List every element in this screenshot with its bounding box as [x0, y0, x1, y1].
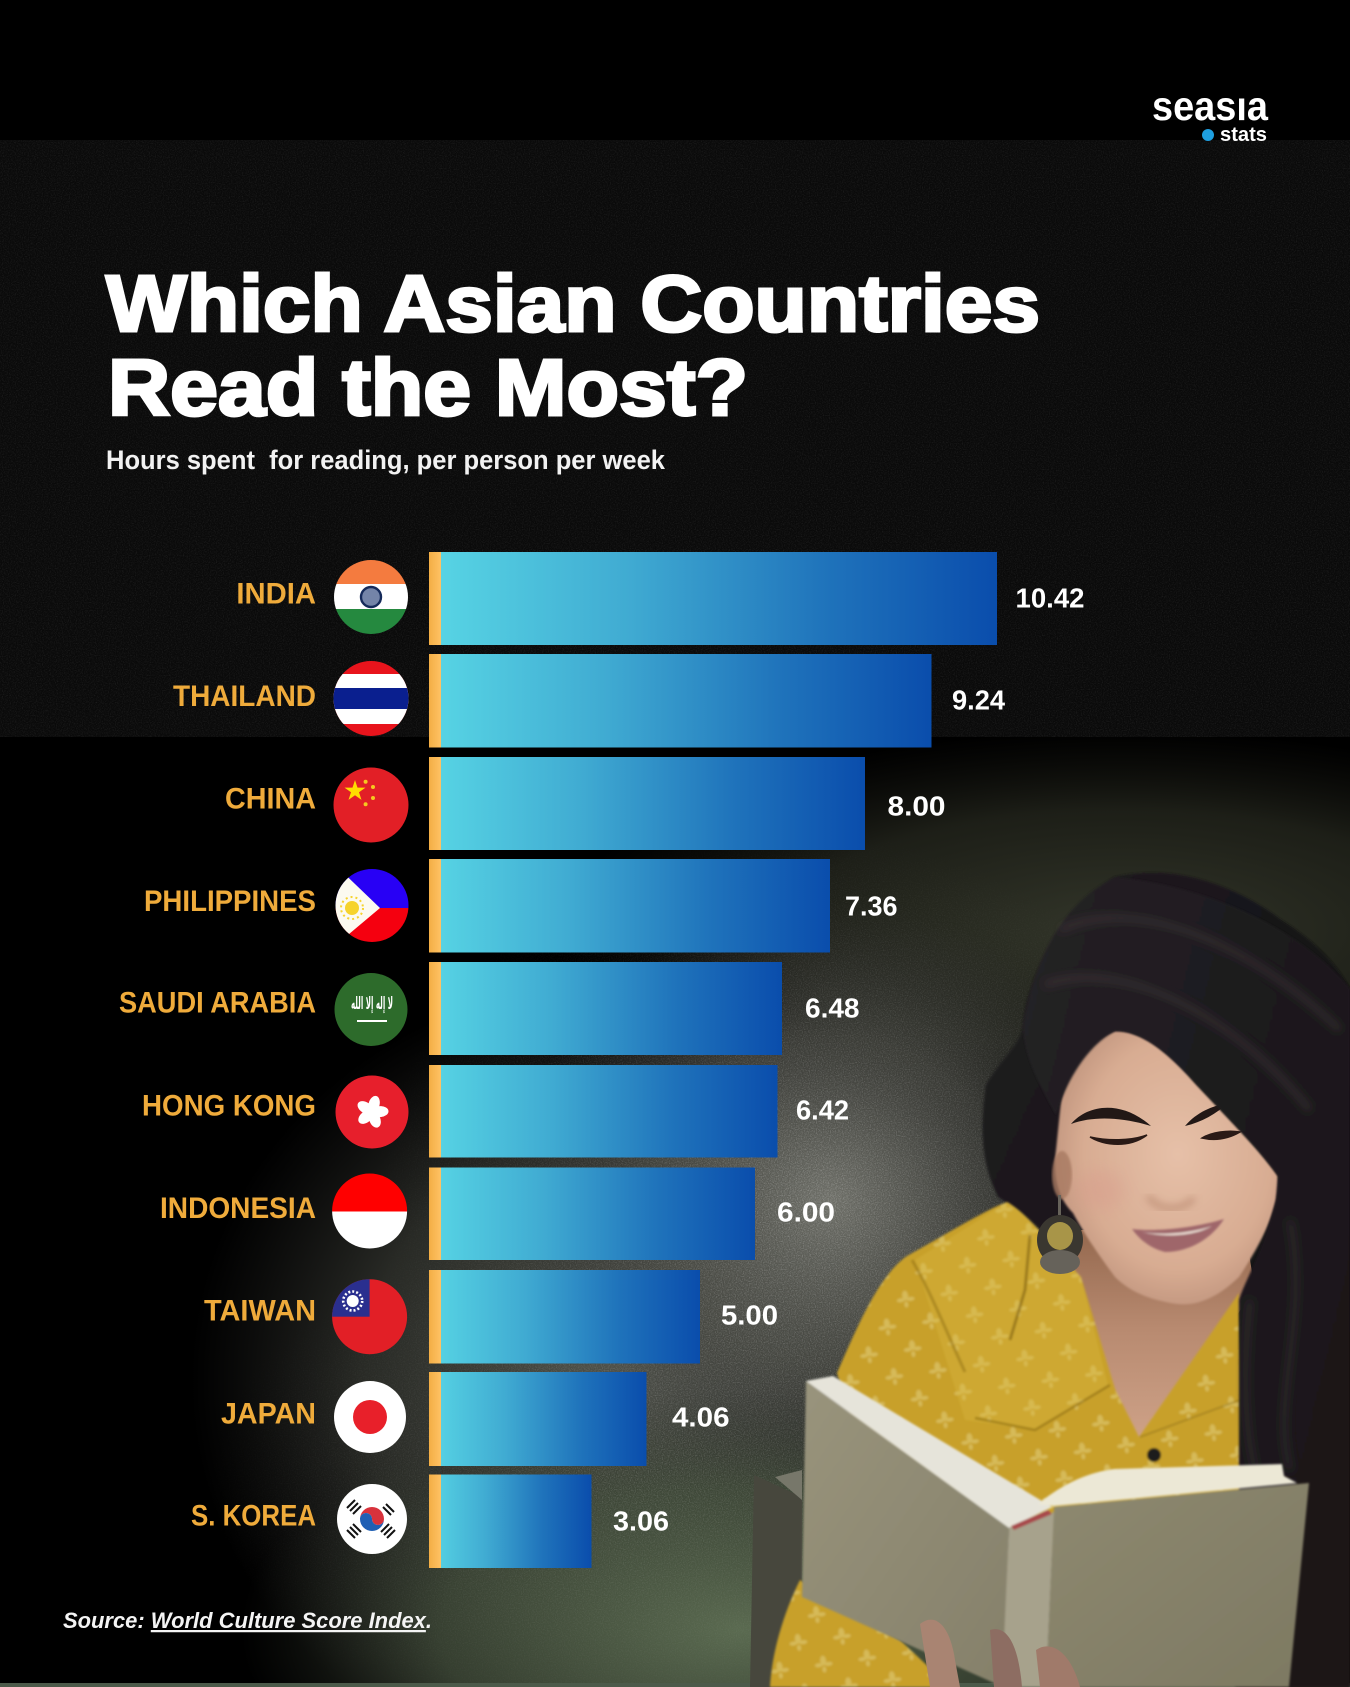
label: South Korea: S. KOREA [191, 1500, 316, 1532]
icon: flag of Thailand [334, 661, 408, 736]
hair back [983, 873, 1350, 1687]
value: Japan: 4.06 [672, 1402, 730, 1432]
ear shadow [1052, 1151, 1072, 1199]
bar: South Korea [429, 1474, 592, 1568]
bar: Saudi Arabia [429, 962, 782, 1055]
eyes [1090, 1131, 1240, 1144]
bar: Philippines [429, 859, 830, 952]
value: Thailand: 9.24 [952, 684, 1005, 716]
row: Japan [221, 1372, 730, 1466]
hair front [1023, 877, 1350, 1687]
icon: flag of the Philippines [336, 869, 408, 942]
icon: flag of China [334, 768, 408, 842]
fingers [920, 1620, 1080, 1687]
value: Indonesia: 6.00 [777, 1196, 835, 1228]
subtitle: Hours spent for reading, per person per week [106, 445, 666, 475]
logo: seasia stats [1152, 83, 1269, 146]
value: Saudi Arabia: 6.48 [805, 992, 860, 1024]
icon: flag of Indonesia [332, 1174, 408, 1248]
row: Indonesia [160, 1168, 835, 1260]
label: Philippines: PHILIPPINES [144, 885, 316, 918]
nose shadow [1148, 1196, 1194, 1208]
earring [1037, 1195, 1083, 1274]
cheek blush [1100, 1183, 1112, 1195]
row: Taiwan [204, 1270, 778, 1364]
source note: Source: World Culture Score Index. [63, 1608, 432, 1633]
icon: logo globe dot [1202, 129, 1214, 141]
row: China [225, 757, 946, 850]
logo: seasia stats: stats [1220, 124, 1267, 146]
label: Japan: JAPAN [221, 1398, 316, 1430]
title: Which Asian Countries [106, 259, 1040, 348]
shirt [770, 1202, 1245, 1687]
bar: Hong Kong [429, 1065, 778, 1158]
label: China: CHINA [225, 782, 316, 816]
face [1052, 1031, 1278, 1304]
bench behind her [750, 1470, 802, 1687]
row: South Korea [191, 1474, 669, 1568]
icon: flag of Japan [334, 1381, 406, 1453]
label: Thailand: THAILAND [173, 680, 316, 713]
bar: Thailand [429, 654, 932, 748]
bar chart: hours per country [119, 552, 1084, 1568]
row: Philippines [144, 859, 898, 952]
eyebrows [1071, 1106, 1220, 1126]
value: China: 8.00 [888, 790, 946, 822]
illustration: woman reading a book [750, 873, 1350, 1687]
value: Taiwan: 5.00 [721, 1300, 778, 1330]
label: Indonesia: INDONESIA [160, 1192, 316, 1225]
value: Hong Kong: 6.42 [796, 1094, 849, 1126]
label: Saudi Arabia: SAUDI ARABIA [119, 986, 316, 1020]
icon: flag of South Korea [337, 1484, 407, 1554]
title: Read the Most? [108, 343, 748, 432]
title [106, 259, 1040, 432]
bar: India [429, 552, 997, 645]
bar: Japan [429, 1372, 646, 1466]
icon: flag of India [334, 560, 408, 634]
bar: Taiwan [429, 1270, 700, 1364]
neck [1074, 1230, 1252, 1438]
lips [1132, 1219, 1224, 1252]
logo: seasia stats: seasia [1152, 83, 1269, 129]
bar: Indonesia [429, 1168, 755, 1260]
open book [802, 1376, 1309, 1687]
icon: flag of Saudi Arabia: لا إله إلا الله [351, 994, 393, 1014]
bar: China [429, 757, 865, 850]
row: Hong Kong [142, 1065, 849, 1158]
value: Philippines: 7.36 [845, 890, 898, 922]
label: Hong Kong: HONG KONG [142, 1090, 316, 1122]
icon: flag of Hong Kong [336, 1076, 408, 1148]
row: Saudi Arabia [119, 962, 860, 1055]
row: India [236, 552, 1084, 645]
value: South Korea: 3.06 [613, 1506, 669, 1536]
icon: flag of Taiwan [332, 1279, 408, 1354]
icon: flag of Saudi Arabia [334, 973, 408, 1046]
row: Thailand [173, 654, 1005, 748]
label: India: INDIA [236, 578, 316, 610]
value: India: 10.42 [1016, 582, 1084, 614]
label: Taiwan: TAIWAN [204, 1294, 316, 1328]
